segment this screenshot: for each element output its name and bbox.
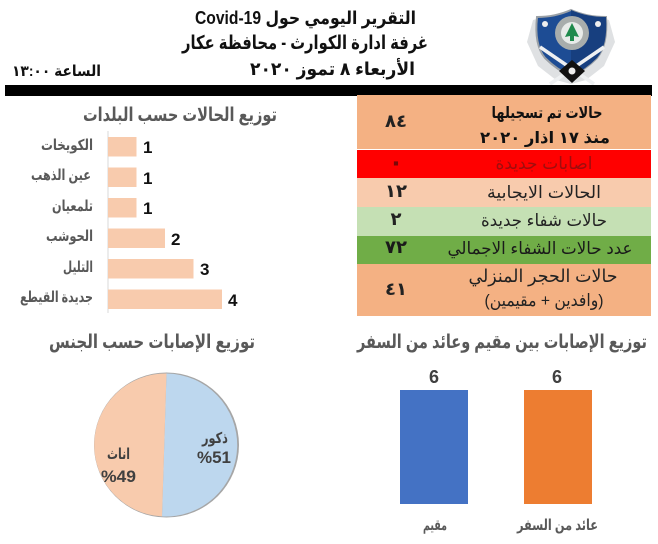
bar chart: towns	[20, 131, 238, 313]
bar chart: towns: عين الذهب	[31, 167, 91, 184]
row: home quarantine: حالات الحجر المنزلي	[468, 266, 618, 287]
bar chart: towns: التليل	[63, 259, 93, 276]
bar chart: towns: 1	[143, 199, 152, 218]
bar chart: towns: تلمعيان	[52, 198, 93, 215]
row: new cases: ٠	[389, 149, 403, 176]
row: home quarantine: (وافدين + مقيمين)	[484, 291, 604, 310]
row: total cases: منذ ١٧ اذار ٢٠٢٠	[480, 130, 610, 147]
time: الساعة ١٣:٠٠	[12, 63, 101, 80]
pie chart: gender: %51	[197, 448, 231, 467]
bar chart: towns: 2	[171, 230, 180, 249]
row: positive cases: الحالات الايجابية	[487, 183, 601, 202]
bar chart: towns: 1	[143, 169, 152, 188]
column chart: 6	[429, 367, 439, 387]
bar chart: towns: جديدة القيطع	[20, 289, 93, 306]
row: positive cases: ١٢	[385, 181, 407, 201]
row: total cases: ٨٤	[385, 111, 407, 131]
row: new recoveries	[357, 207, 651, 236]
row: total cases	[357, 95, 651, 149]
icon: shield logo	[527, 10, 615, 84]
panel: cases by gender	[49, 332, 255, 518]
row: positive cases	[357, 178, 651, 207]
panel: cases by town	[20, 105, 277, 313]
column chart: مقيم	[423, 517, 447, 534]
column chart	[400, 367, 598, 534]
pie chart: gender	[94, 372, 239, 518]
title line 2: غرفة ادارة الكوارث - محافظة عكار	[181, 33, 428, 54]
date: الأربعاء ٨ تموز ٢٠٢٠	[250, 58, 415, 80]
column chart: 6	[552, 367, 562, 387]
bar chart: towns: 4	[228, 291, 238, 310]
bar chart: towns: الكويخات	[41, 137, 93, 154]
heading: cases by gender: توزيع الإصابات حسب الجنس	[49, 332, 255, 353]
pie chart: gender: %49	[101, 467, 136, 486]
bar chart: towns: 1	[143, 138, 152, 157]
column chart: عائد من السفر	[516, 517, 598, 534]
row: new cases	[357, 149, 651, 178]
row: total recoveries: ٧٢	[385, 237, 407, 257]
heading: cases by town: توزيع الحالات حسب البلدات	[83, 105, 277, 126]
header	[12, 8, 428, 80]
row: new recoveries: ٢	[390, 209, 402, 229]
title line 1: التقرير اليومي حول Covid-19	[195, 8, 416, 29]
row: total recoveries: عدد حالات الشفاء الاجمالي	[448, 239, 632, 259]
row: home quarantine: ٤١	[385, 279, 407, 299]
row: total recoveries	[357, 236, 651, 264]
pie chart: gender: اناث	[107, 446, 130, 463]
black divider bar	[5, 85, 652, 96]
row: new cases: اصابات جديدة	[496, 154, 592, 173]
bar chart: towns: الحوشب	[46, 228, 93, 245]
panel: resident vs returning traveller	[356, 332, 647, 534]
row: home quarantine	[357, 264, 651, 316]
row: total cases: حالات تم تسجيلها	[492, 105, 602, 122]
panel: statistics table	[357, 95, 651, 316]
bar chart: towns: 3	[200, 260, 209, 279]
row: new recoveries: حالات شفاء جديدة	[481, 211, 607, 230]
pie chart: gender: ذكور	[201, 430, 228, 447]
